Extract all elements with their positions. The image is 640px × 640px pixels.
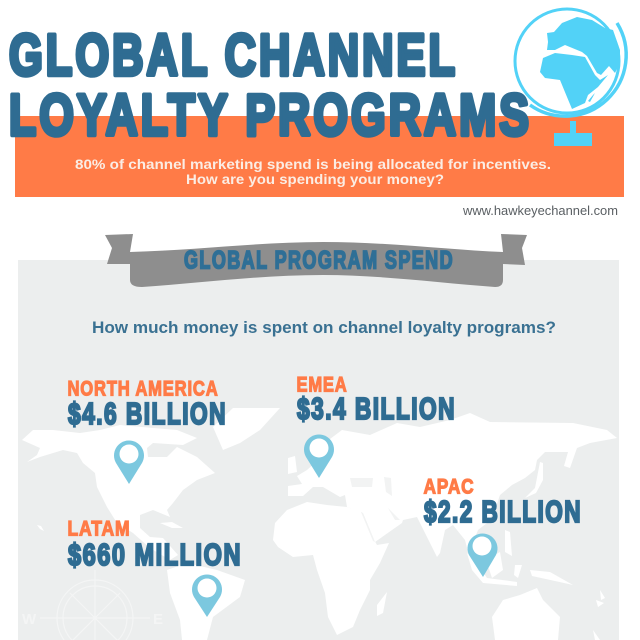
stat: north america: $4.6 BILLION: [68, 396, 227, 431]
stat: emea: EMEA: [296, 374, 348, 396]
stat: latam: $660 MILLION: [68, 537, 242, 572]
orange subtitle band: [15, 116, 624, 197]
world map: [22, 408, 617, 640]
title: GLOBAL CHANNEL: [9, 23, 458, 88]
stat: emea: [296, 374, 456, 426]
subtitle text: [75, 156, 551, 187]
compass rose: W: [22, 611, 37, 628]
panel: global program spend: [18, 260, 619, 640]
icon: globe: [515, 9, 626, 146]
ribbon heading: GLOBAL PROGRAM SPEND: [184, 246, 454, 274]
title: [9, 23, 532, 148]
compass rose: [22, 570, 163, 640]
icon: pin emea: [304, 435, 334, 478]
website url: www.hawkeyechannel.com: [462, 204, 618, 218]
ribbon banner: [105, 234, 527, 287]
stat: north america: NORTH AMERICA: [68, 378, 218, 400]
stat: apac: [424, 476, 582, 529]
question heading: How much money is spent on channel loyalty programs?: [92, 319, 556, 337]
compass rose: E: [153, 611, 163, 628]
stat: latam: [68, 518, 242, 572]
inland seas: [350, 477, 400, 542]
stat: north america: [68, 378, 227, 431]
icon: pin apac: [468, 533, 498, 577]
subtitle text: 80% of channel marketing spend is being allocated for incentives.: [75, 156, 551, 172]
subtitle text: How are you spending your money?: [186, 171, 444, 187]
icon: pin north america: [114, 441, 144, 484]
stat: emea: $3.4 BILLION: [297, 391, 456, 426]
stat: apac: APAC: [424, 476, 474, 498]
stat: latam: LATAM: [68, 518, 130, 540]
icon: pin latam: [192, 575, 222, 617]
stat: apac: $2.2 BILLION: [424, 494, 582, 529]
